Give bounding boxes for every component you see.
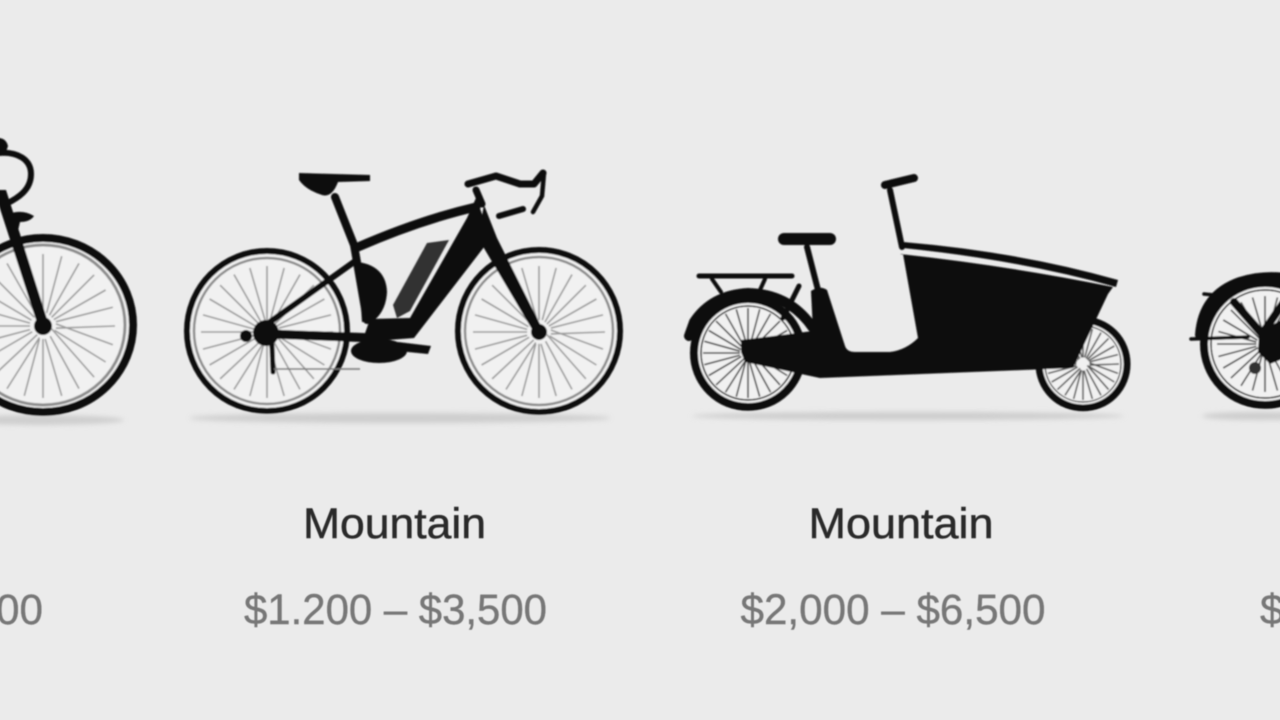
- rack stubs: bike 4: [1191, 294, 1248, 339]
- ground shadow: bike 3: [692, 412, 1124, 420]
- fork and handlebar: bike 1: [0, 138, 52, 335]
- frame and hub: bike 4: [1234, 302, 1280, 374]
- front wheel: bike 2: [458, 250, 620, 412]
- label: Mountain (bike 2): Mountain: [303, 500, 486, 548]
- rear hub and derailleur: bike 2: [240, 320, 360, 372]
- frame: bike 2: [270, 197, 541, 342]
- front wheel: bike 1: [0, 238, 133, 412]
- rack and fender: bike 3: [689, 276, 813, 336]
- ground shadow: bike 1: [0, 415, 124, 425]
- bike 4: partially cropped bike at right edge: [1191, 277, 1280, 420]
- label: Mountain (bike 3): Mountain: [808, 500, 994, 548]
- saddle: bike 2: [299, 173, 370, 195]
- saddle: bike 3: [784, 239, 830, 290]
- front wheel: bike 3: [1039, 320, 1127, 408]
- ground shadow: bike 2: [190, 413, 610, 423]
- handlebar: bike 2: [468, 173, 544, 216]
- motor and pedal: bike 2: [351, 339, 431, 363]
- rear wheel: bike 4: [1204, 283, 1280, 405]
- cargo box and frame: bike 3: [741, 254, 1113, 378]
- price: bike 3: $2,000 – $6,500: [740, 586, 1046, 634]
- battery: bike 2: [393, 240, 449, 318]
- cargo box top stripe: bike 3: [903, 242, 1118, 287]
- bike 1: partially cropped road bike at left edge: [0, 138, 133, 425]
- front hub: bike 2: [531, 324, 547, 340]
- bike 3: cargo bike: [689, 178, 1127, 420]
- price: bike 2: $1.200 – $3,500: [244, 586, 547, 634]
- handlebar: bike 3: [885, 178, 914, 247]
- fender: bike 4: [1200, 277, 1280, 335]
- bike 2: electric road bike: [187, 173, 620, 423]
- rear wheel: bike 3: [694, 299, 802, 407]
- ground shadow: bike 4: [1202, 412, 1280, 420]
- rear wheel: bike 2: [187, 251, 347, 411]
